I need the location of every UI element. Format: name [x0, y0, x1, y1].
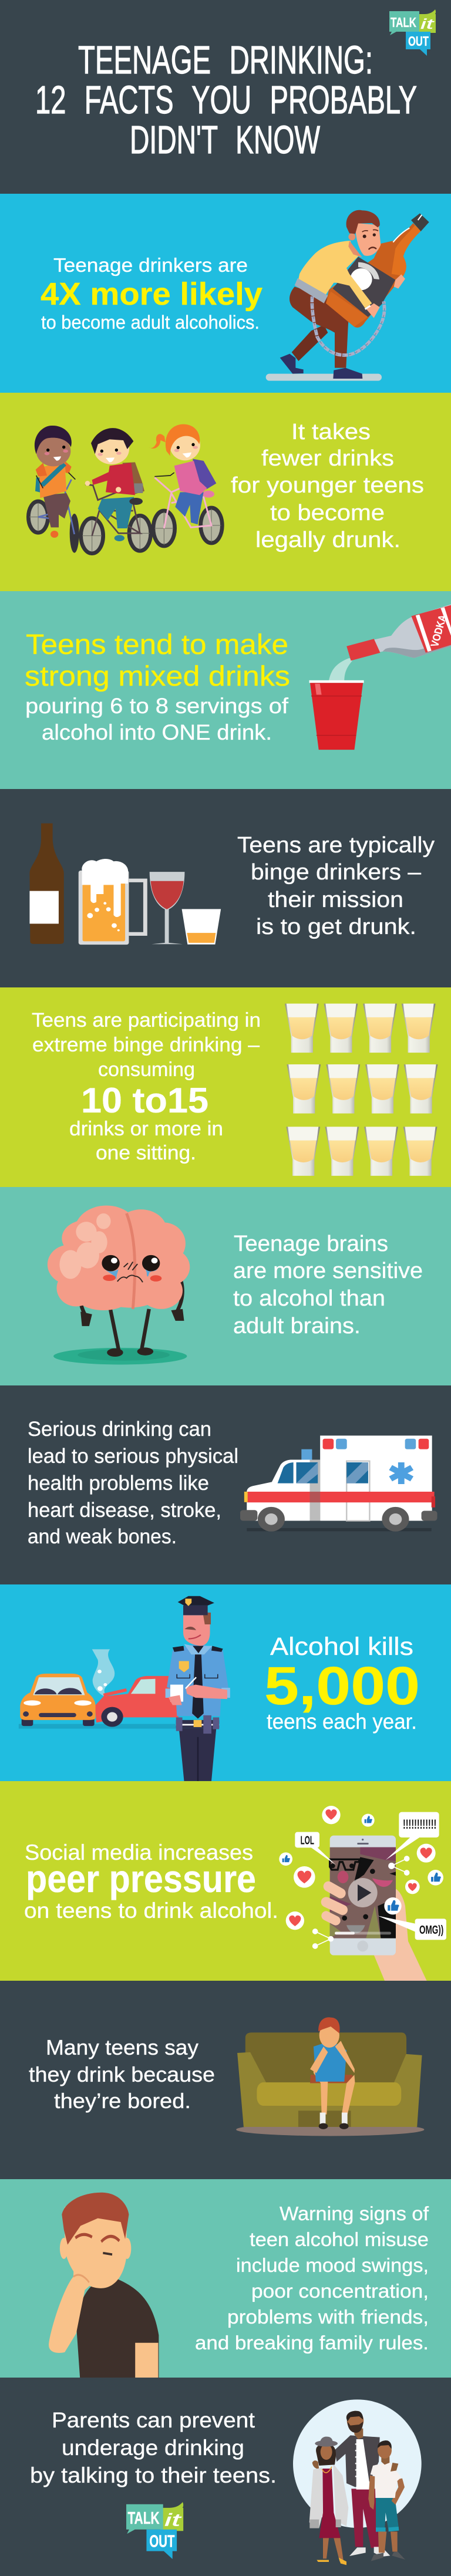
text block: they’re bored.: [54, 2089, 191, 2113]
icon: phone with social media reactions: LOL: [301, 1834, 314, 1847]
panel: sensitive brains: [0, 1187, 451, 1385]
text block: teens each year.: [267, 1710, 417, 1734]
text block: Teens are typically: [237, 833, 435, 858]
text block: pouring 6 to 8 servings of: [25, 694, 289, 718]
icon: crying brain: [48, 1205, 190, 1364]
panel: alcohol kills: [0, 1584, 451, 1781]
logo: talk it out: [126, 2502, 183, 2559]
panel: extreme binge drinking: [0, 987, 451, 1187]
text block: [25, 629, 290, 744]
text block: Teenage drinkers are: [53, 254, 248, 276]
icon: vodka bottle pouring into red cup: VODKA: [428, 613, 449, 648]
text block: and weak bones.: [28, 1525, 177, 1548]
text block: strong mixed drinks: [25, 661, 290, 692]
text block: fewer drinks: [261, 446, 394, 471]
text block: Serious drinking can: [28, 1418, 211, 1441]
text block: alcohol into ONE drink.: [42, 720, 272, 744]
logo: talk it out: OUT: [149, 2531, 174, 2550]
text block: health problems like: [28, 1472, 209, 1495]
text block: adult brains.: [233, 1314, 361, 1338]
text block: It takes: [291, 420, 371, 444]
text block: peer pressure: [26, 1857, 256, 1900]
panel: bored teens: [0, 1981, 451, 2179]
text block: extreme binge drinking –: [32, 1034, 260, 1056]
text block: Alcohol kills: [270, 1633, 413, 1661]
text block: [264, 1633, 420, 1734]
text block: to become adult alcoholics.: [41, 312, 260, 333]
icon: bored teen on a couch: [236, 2017, 424, 2136]
text block: Social media increases: [25, 1840, 253, 1864]
text block: to alcohol than: [233, 1286, 385, 1311]
logo: talk it out: [389, 9, 436, 56]
text block: [24, 1840, 278, 1923]
text block: problems with friends,: [227, 2306, 429, 2328]
text block: and breaking family rules.: [195, 2332, 429, 2354]
text block: Warning signs of: [280, 2203, 429, 2224]
text block: include mood swings,: [236, 2254, 429, 2276]
text block: [28, 1418, 238, 1548]
text block: [32, 1009, 261, 1164]
text block: [237, 833, 435, 939]
text block: Many teens say: [46, 2035, 198, 2059]
text block: Teens are participating in: [32, 1009, 261, 1031]
icon: bottle, beer mug, wine glass and tumbler: [29, 823, 221, 945]
logo: talk it out: it: [420, 16, 435, 32]
panel: health problems: [0, 1385, 451, 1584]
panel: title header: [0, 0, 451, 194]
text block: consuming: [98, 1058, 195, 1081]
text block: to become: [270, 501, 385, 525]
panel: parents can prevent: [0, 2378, 451, 2576]
text block: binge drinkers –: [251, 860, 422, 885]
text block: on teens to drink alcohol.: [24, 1899, 278, 1923]
icon: phone with social media reactions: [279, 1806, 446, 1981]
logo: talk it out: OUT: [408, 33, 429, 49]
panel: fewer drinks for younger teens: [0, 393, 451, 591]
logo: talk it out: TALK: [127, 2508, 160, 2527]
text block: for younger teens: [231, 473, 424, 498]
title: [35, 38, 417, 162]
panel: binge drinkers: [0, 789, 451, 987]
text block: heart disease, stroke,: [28, 1499, 221, 1522]
text block: 10 to15: [81, 1081, 208, 1120]
text block: poor concentration,: [251, 2280, 429, 2302]
panel: strong mixed drinks: [0, 591, 451, 789]
text block: Teenage brains: [234, 1232, 388, 1256]
text block: underage drinking: [62, 2436, 244, 2460]
logo: talk it out: TALK: [391, 15, 416, 30]
text block: [233, 1232, 423, 1338]
icon: police officer and car crash: [19, 1596, 230, 1781]
text block: Teens tend to make: [26, 629, 288, 660]
text block: [29, 2035, 215, 2113]
text block: Parents can prevent: [52, 2408, 255, 2432]
text block: 5,000: [264, 1656, 420, 1716]
icon: man chained to a bottle: [266, 210, 429, 381]
icon: kids on bicycles: [28, 424, 222, 554]
logo: talk it out: it: [164, 2511, 183, 2530]
icon: twelve shot glasses: [285, 1004, 437, 1176]
text block: by talking to their teens.: [30, 2463, 277, 2487]
text block: drinks or more in: [69, 1118, 223, 1140]
text block: [41, 254, 262, 333]
text block: are more sensitive: [233, 1259, 423, 1283]
text block: 4X more likely: [41, 277, 262, 312]
text block: they drink because: [29, 2062, 215, 2086]
icon: ambulance: [240, 1435, 437, 1532]
icon: teen with hand on face: [49, 2193, 159, 2378]
text block: one sitting.: [96, 1142, 196, 1164]
text block: [231, 420, 424, 552]
text block: is to get drunk.: [256, 915, 416, 939]
title: DIDN'T KNOW: [130, 118, 321, 162]
panel: 4x more likely: [0, 194, 451, 393]
text block: [195, 2203, 429, 2354]
icon: vodka bottle pouring into red cup: [309, 604, 451, 750]
text block: [30, 2408, 277, 2487]
panel: peer pressure: [0, 1781, 451, 1981]
text block: lead to serious physical: [28, 1445, 238, 1468]
text block: teen alcohol misuse: [250, 2228, 429, 2250]
text block: their mission: [268, 888, 403, 912]
text block: legally drunk.: [255, 528, 400, 552]
panel: warning signs: [0, 2179, 451, 2378]
icon: family in a circle: [293, 2399, 422, 2565]
